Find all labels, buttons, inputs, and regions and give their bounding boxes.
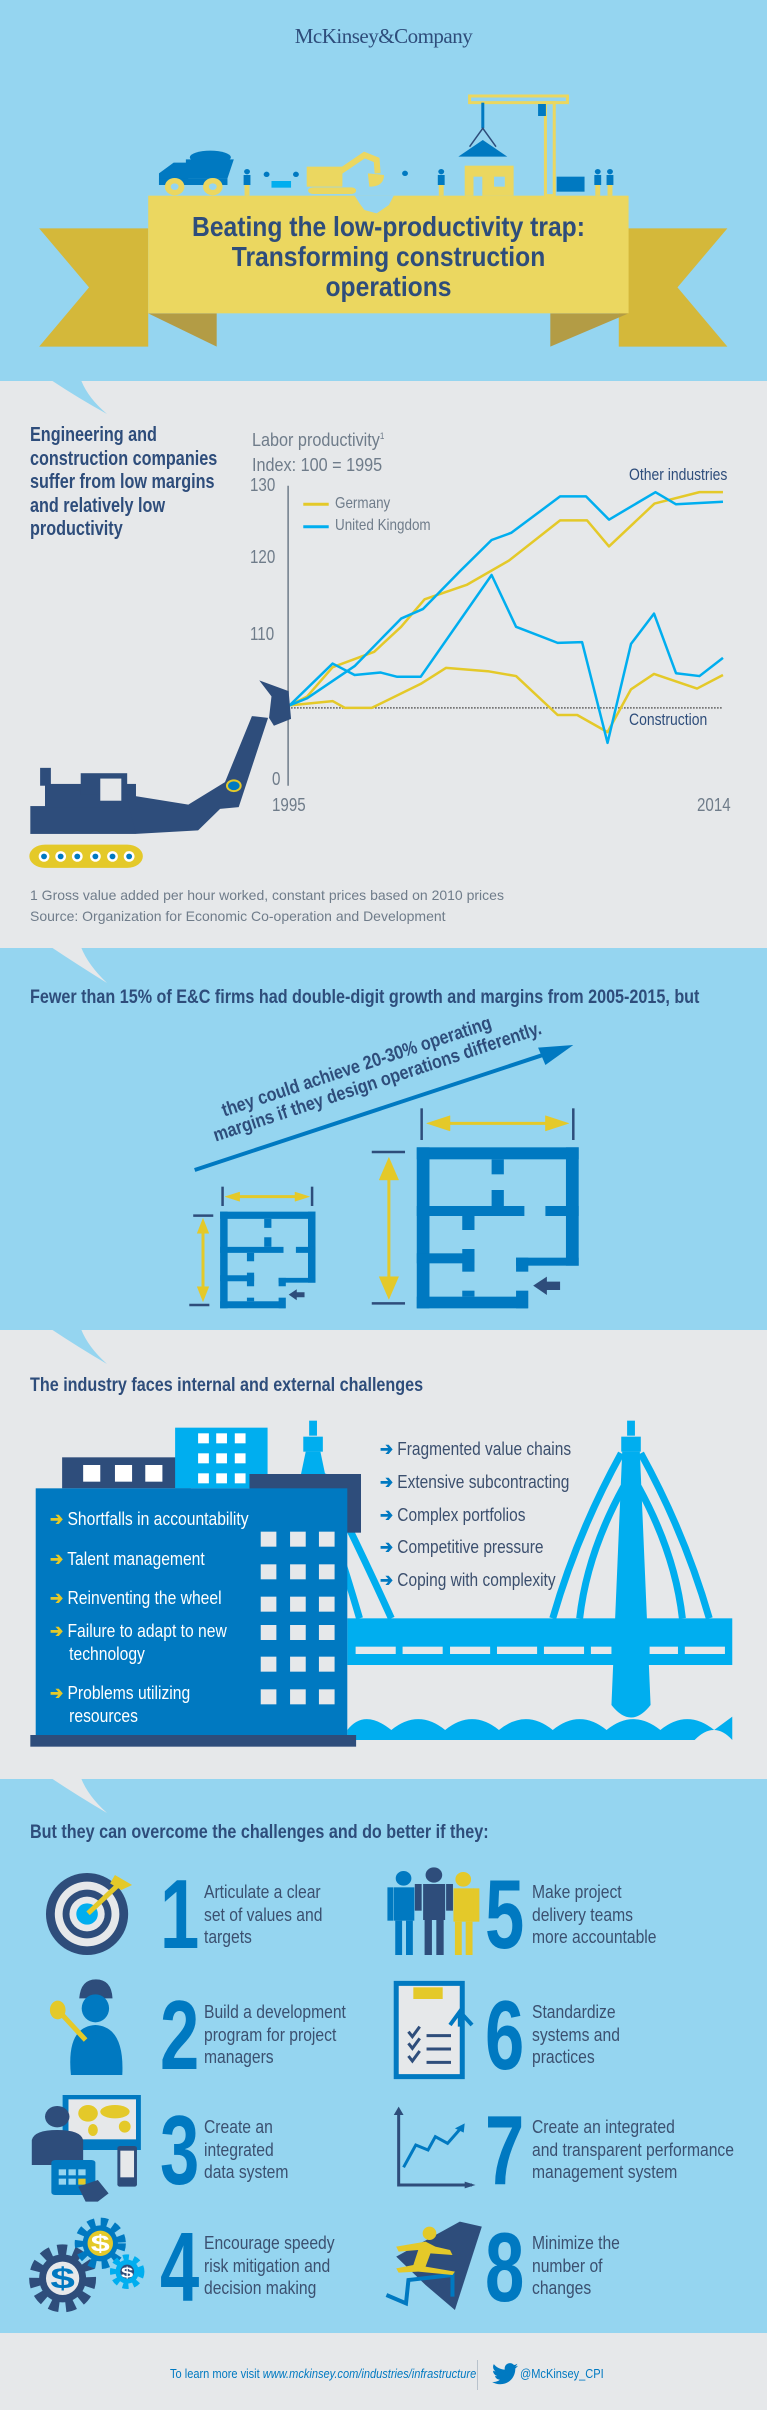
text: Other industries	[629, 465, 727, 484]
item 7: and transparent performance	[532, 2140, 734, 2160]
item 4	[160, 2212, 335, 2322]
footnote: Source: Organization for Economic Co-operation and Development	[30, 908, 446, 924]
external challenges list	[380, 1439, 571, 1590]
item 2: Build a development	[204, 2002, 346, 2022]
external challenges list: ➔ Competitive pressure	[380, 1537, 544, 1557]
internal challenges list: resources	[69, 1706, 138, 1726]
text: 110	[250, 624, 274, 644]
item 2: 2	[160, 1980, 199, 2090]
item 6: practices	[532, 2047, 595, 2067]
item 2	[160, 1980, 346, 2090]
internal challenges list: ➔ Failure to adapt to new	[50, 1621, 227, 1641]
footer: To learn more visit www.mckinsey.com/industries/infrastructure	[170, 2366, 476, 2381]
item 2: program for project	[204, 2024, 336, 2044]
item 1: set of values and	[204, 1904, 322, 1924]
text: Construction	[629, 710, 707, 729]
footer: @McKinsey_CPI	[520, 2366, 604, 2381]
text: 0	[272, 769, 280, 789]
item 8: 8	[485, 2212, 524, 2322]
item 6: 6	[485, 1980, 524, 2090]
item 5: Make project	[532, 1882, 622, 1902]
text: 2014	[697, 795, 731, 815]
internal challenges list: ➔ Talent management	[50, 1549, 205, 1569]
header illustration: ribbon and construction scene	[39, 94, 728, 347]
heading: E&C companies: and relatively low	[30, 494, 165, 516]
text: 120	[250, 547, 275, 567]
internal challenges list: ➔ Reinventing the wheel	[50, 1588, 222, 1608]
item 3: data system	[204, 2162, 288, 2182]
external challenges list: ➔ Complex portfolios	[380, 1505, 525, 1525]
item 1	[160, 1859, 322, 1969]
section: challenges background	[0, 1330, 767, 1779]
title: Transforming construction	[232, 241, 545, 272]
chart title: Labor productivity1	[252, 430, 384, 450]
item 3: integrated	[204, 2140, 274, 2160]
icons: items 3, 7, 4, 8: $	[121, 2264, 134, 2281]
title	[192, 211, 585, 302]
footnote: 1 Gross value added per hour worked, constant prices based on 2010 prices	[30, 887, 504, 903]
item 1: targets	[204, 1927, 252, 1947]
text: 1995	[272, 795, 306, 815]
item 8: changes	[532, 2278, 591, 2298]
internal challenges list: ➔ Problems utilizing	[50, 1683, 190, 1703]
chart labels	[250, 465, 731, 815]
section: chart background	[0, 381, 767, 948]
internal challenges list: ➔ Shortfalls in accountability	[50, 1509, 249, 1529]
section: recommendations background	[0, 1779, 767, 2333]
icons: items 3, 7, 4, 8: $	[50, 2261, 75, 2295]
item 5: delivery teams	[532, 1904, 633, 1924]
chart title: Index: 100 = 1995	[252, 455, 382, 475]
title: operations	[326, 271, 451, 302]
item 7: management system	[532, 2162, 677, 2182]
item 3: Create an	[204, 2117, 273, 2137]
item 3: 3	[160, 2095, 199, 2205]
footnote	[30, 887, 504, 924]
heading: E&C companies: productivity	[30, 518, 123, 540]
item 2: managers	[204, 2047, 274, 2067]
panel: productivity chart section	[30, 424, 384, 540]
item 4: risk mitigation and	[204, 2256, 330, 2276]
icons: items 3, 7, 4, 8	[29, 2095, 482, 2312]
icons: items 1, 5, 2, 6	[46, 1867, 480, 2080]
heading: E&C companies	[30, 424, 217, 540]
item 8	[485, 2212, 620, 2322]
item 4: Encourage speedy	[204, 2233, 335, 2253]
text: United Kingdom	[335, 517, 431, 534]
illustration: buildings and bridge	[30, 1420, 732, 1747]
heading: E&C companies: suffer from low margins	[30, 471, 215, 493]
heading: E&C companies: construction companies	[30, 448, 217, 470]
logo: McKinsey&Company	[295, 24, 472, 48]
external challenges list: ➔ Coping with complexity	[380, 1570, 556, 1590]
item 5: 5	[485, 1859, 524, 1969]
heading: fewer than 15%: Fewer than 15% of E&C firms had double-digit growth and margins from 2005-2015, but	[30, 987, 699, 1008]
item 5: more accountable	[532, 1927, 656, 1947]
footer	[170, 2360, 604, 2390]
item 3	[160, 2095, 288, 2205]
section: margins background	[0, 948, 767, 1330]
external challenges list: ➔ Extensive subcontracting	[380, 1472, 569, 1492]
header background	[0, 0, 767, 381]
icons: items 3, 7, 4, 8: $	[91, 2231, 110, 2257]
internal challenges list	[50, 1509, 249, 1726]
item 8: number of	[532, 2256, 603, 2276]
item 1: 1	[160, 1859, 199, 1969]
item 5	[485, 1859, 656, 1969]
item 6: systems and	[532, 2024, 620, 2044]
external challenges list: ➔ Fragmented value chains	[380, 1439, 571, 1459]
heading: E&C companies: Engineering and	[30, 424, 157, 446]
chart title	[252, 430, 384, 475]
item 7: 7	[485, 2095, 524, 2205]
item 1: Articulate a clear	[204, 1882, 321, 1902]
text: 130	[250, 475, 275, 495]
item 4: decision making	[204, 2278, 316, 2298]
heading: challenges: The industry faces internal and external challenges	[30, 1375, 423, 1396]
growth arrow and floor plans	[189, 1045, 579, 1308]
footer background	[0, 2333, 767, 2410]
item 4: 4	[160, 2212, 199, 2322]
item 7	[485, 2095, 734, 2205]
rotated margin text: they could achieve 20-30% operating	[219, 1013, 494, 1121]
title: Beating the low-productivity trap:	[192, 211, 585, 242]
icon: twitter bird	[492, 2363, 518, 2384]
rotated margin text: margins if they design operations differently.	[211, 1018, 544, 1146]
item 6: Standardize	[532, 2002, 616, 2022]
line chart with excavator	[29, 486, 724, 868]
item 6	[485, 1980, 620, 2090]
text: Germany	[335, 495, 390, 512]
internal challenges list: technology	[69, 1644, 145, 1664]
item 7: Create an integrated	[532, 2117, 675, 2137]
heading: overcome: But they can overcome the challenges and do better if they:	[30, 1822, 489, 1843]
item 8: Minimize the	[532, 2233, 620, 2253]
